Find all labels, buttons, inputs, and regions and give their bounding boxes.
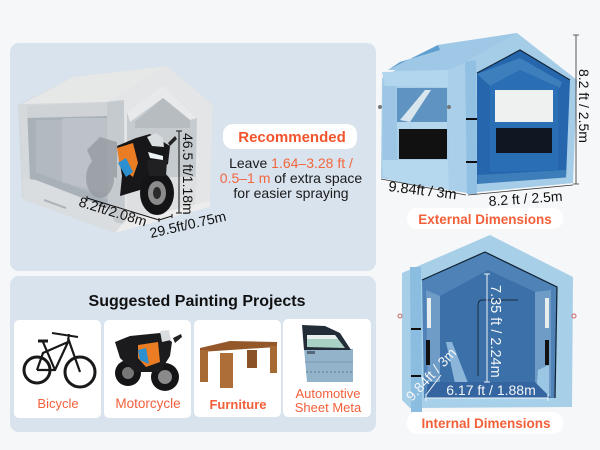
height label: 46.5 ft/1.18m (180, 133, 196, 215)
heading: Suggested Painting Projects (89, 293, 306, 310)
illustration: transparent tent with motorcycle (18, 66, 228, 241)
caption: internal dimensions: Internal Dimensions (421, 416, 551, 431)
side window (397, 88, 447, 123)
caption: internal dimensions (407, 412, 563, 434)
card: bicycle (14, 320, 101, 418)
label: Sheet Meta (295, 400, 362, 415)
ghost motorcycle (86, 137, 117, 198)
recommended badge (223, 124, 357, 149)
motorcycle (117, 133, 177, 215)
card: automotive sheet metal (283, 319, 371, 417)
dimension label: width: 8.2 ft / 2.5m (488, 188, 563, 209)
dimension lines: external (381, 35, 579, 195)
dimension lines: internal (426, 274, 548, 401)
panel: recommended clearance (10, 43, 376, 271)
front opening (477, 50, 570, 185)
caption: external dimensions: External Dimensions (418, 212, 552, 227)
dimension label: height: 7.35 ft / 2.24m (487, 285, 503, 378)
recommendation text: for easier spraying (233, 185, 349, 201)
card: motorcycle (104, 320, 191, 418)
recommendation text: Leave 1.64–3.28 ft / (229, 155, 353, 171)
width label: 8.2ft/2.08m (77, 194, 149, 229)
icon: bicycle (24, 333, 95, 387)
dimension label: height: 8.2 ft / 2.5m (576, 69, 592, 143)
back window (495, 90, 553, 122)
label (295, 386, 362, 415)
caption: external dimensions (407, 208, 563, 229)
card: furniture (194, 320, 281, 417)
dimension lines (87, 131, 182, 222)
icon: motorcycle (115, 330, 182, 391)
label: Automotive (295, 386, 361, 401)
label: Bicycle (37, 396, 79, 411)
panel: suggested painting projects (10, 276, 376, 432)
icon: car door (302, 325, 353, 382)
door column (465, 60, 477, 194)
dimension label: depth: 9.84ft / 3m (402, 345, 459, 404)
recommendation text: 0.5–1 m of extra space (220, 170, 362, 186)
illustration: external dimensions tent (378, 33, 577, 194)
label: Furniture (209, 397, 267, 412)
door column (410, 267, 422, 412)
recommended badge: Recommended (238, 129, 346, 146)
dimension label: width: 6.17 ft / 1.88m (446, 382, 536, 398)
label: Motorcycle (115, 396, 181, 411)
dimension label: depth: 9.84ft / 3m (388, 179, 457, 203)
clearance label: 29.5ft/0.75m (148, 208, 228, 241)
recommendation text (220, 155, 362, 201)
icon: wooden table (200, 341, 277, 388)
illustration: internal dimensions tent (398, 235, 576, 412)
